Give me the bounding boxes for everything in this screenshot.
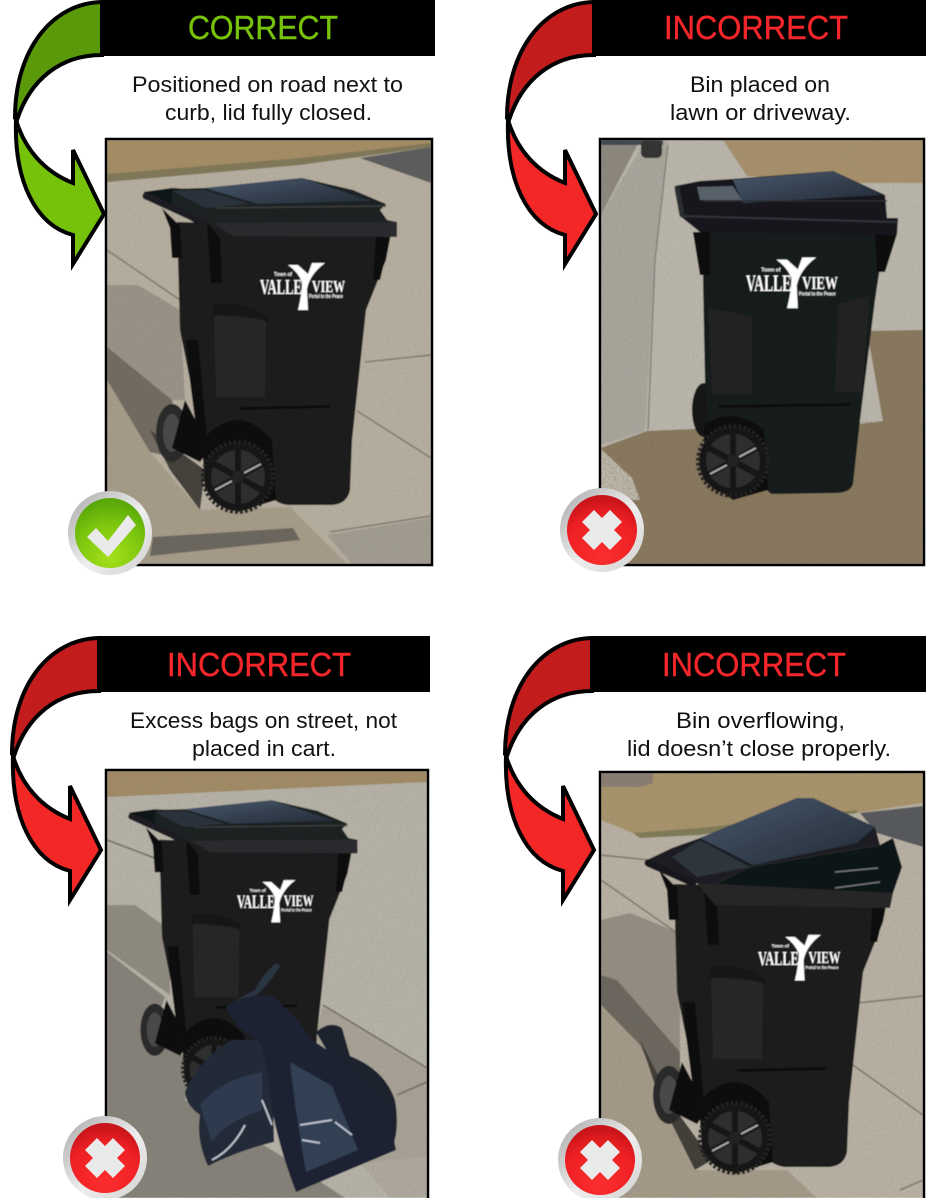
- description text: [670, 72, 851, 125]
- description text: placed in cart.: [192, 736, 336, 761]
- bin logo: Town of: [761, 268, 781, 274]
- bin logo: Portal to the Peace: [806, 965, 839, 971]
- description text: [627, 708, 891, 761]
- description text: [132, 72, 403, 125]
- arrow: green curved: [15, 2, 104, 264]
- photo: overflowing bin: [600, 773, 923, 1198]
- description text: lawn or driveway.: [670, 100, 851, 125]
- description text: Bin overflowing,: [676, 708, 845, 733]
- photo: bin on lawn: [601, 140, 923, 564]
- bin body: [692, 231, 897, 500]
- icon: red cross badge: [560, 488, 644, 572]
- bin logo: VALLE: [260, 275, 302, 299]
- bin logo: Portal to the Peace: [281, 908, 312, 913]
- bin logo: VALLE: [746, 271, 791, 296]
- description text: curb, lid fully closed.: [165, 100, 372, 125]
- photo: bin on road next to curb: [107, 140, 431, 564]
- arrow: red curved: [505, 638, 594, 900]
- bin logo: Portal to the Peace: [309, 294, 343, 300]
- bin logo: [260, 263, 345, 310]
- bin logo: VIEW: [312, 277, 345, 296]
- heading bar: INCORRECT: [594, 0, 926, 56]
- heading bar: INCORRECT: [592, 636, 926, 692]
- bin logo: Town of: [250, 888, 266, 893]
- description text: lid doesn’t close properly.: [627, 736, 891, 761]
- panel: incorrect, bin overflowing: [505, 636, 926, 1198]
- panel: incorrect, on lawn or driveway: [507, 0, 926, 572]
- heading bar: CORRECT: CORRECT: [188, 9, 338, 46]
- heading bar: INCORRECT: [98, 636, 430, 692]
- bin logo: [237, 880, 314, 922]
- description text: Bin placed on: [690, 72, 830, 97]
- description text: Positioned on road next to: [132, 72, 403, 97]
- description text: [130, 708, 397, 761]
- icon: red cross badge: [63, 1116, 147, 1198]
- arrow: red curved: [507, 2, 596, 264]
- bin logo: Town of: [274, 272, 292, 278]
- bin logo: Town of: [772, 944, 789, 950]
- bin logo: [746, 258, 838, 308]
- overflowing bag and open lid: [647, 798, 902, 908]
- description text: Excess bags on street, not: [130, 708, 397, 733]
- bin logo: [758, 935, 841, 981]
- icon: green check badge: [68, 491, 152, 575]
- bin logo: VIEW: [284, 893, 314, 910]
- arrow: red curved: [12, 638, 101, 900]
- bin logo: VALLE: [237, 892, 275, 913]
- heading bar: CORRECT: [101, 0, 435, 56]
- bin logo: VALLE: [758, 948, 799, 970]
- bin logo: Portal to the Peace: [799, 291, 836, 297]
- heading bar: INCORRECT: INCORRECT: [662, 646, 846, 683]
- icon: red cross badge: [558, 1118, 642, 1198]
- bin logo: VIEW: [808, 948, 841, 967]
- bin lid: [675, 171, 898, 235]
- heading bar: INCORRECT: INCORRECT: [664, 9, 848, 46]
- panel: correct placement: [15, 0, 435, 575]
- panel: incorrect, excess bags: [12, 636, 430, 1198]
- garbage bags: [185, 963, 397, 1192]
- heading bar: INCORRECT: INCORRECT: [167, 646, 351, 683]
- bin logo: VIEW: [802, 273, 838, 293]
- photo: bin with bags beside it: [107, 771, 427, 1198]
